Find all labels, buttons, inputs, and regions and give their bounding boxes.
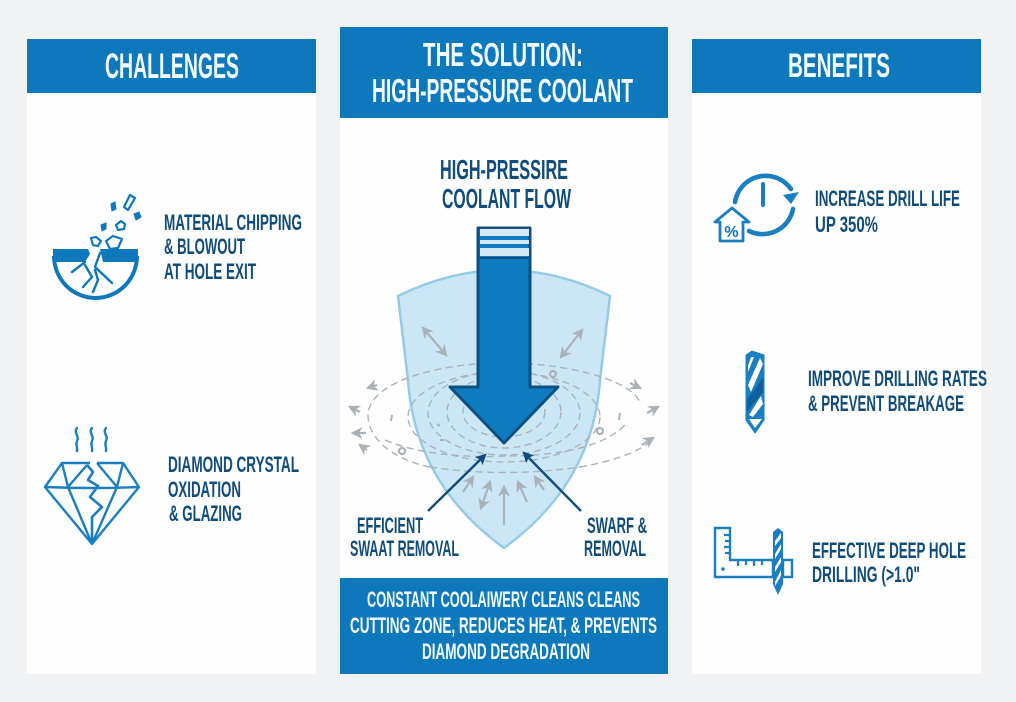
swirling flow lines (368, 363, 652, 472)
text: drill life (815, 186, 960, 237)
text: coolant flow title: COOLANT FLOW (442, 183, 571, 214)
text: swarf removal: SWARF & (587, 513, 647, 538)
text: swarf removal: REMOVAL (584, 536, 646, 561)
heading: solution: HIGH-PRESSURE COOLANT (372, 72, 633, 109)
panel: challenges (27, 39, 316, 674)
text: deep hole: DRILLING (>1.0" (812, 562, 920, 587)
icon: cracked diamond with heat (45, 428, 139, 544)
text: drilling rates (808, 366, 987, 416)
text: material chipping: MATERIAL CHIPPING (164, 210, 302, 235)
text: material chipping: & BLOWOUT (164, 234, 245, 259)
text: coolant flow title: HIGH-PRESSIRE (440, 154, 568, 185)
heading: solution: THE SOLUTION: (423, 36, 583, 73)
big coolant arrow (450, 228, 558, 443)
grey flow arrows (350, 328, 658, 525)
text: coolant flow title (440, 154, 571, 214)
footer banner: CONSTANT COOLAIWERY CLEANS CLEANS (367, 587, 640, 612)
callout arrows (428, 453, 581, 511)
heading: benefits (692, 39, 981, 93)
icon: drill bit (746, 351, 764, 433)
text: diamond oxidation: OXIDATION (168, 477, 241, 502)
text: diamond oxidation (168, 452, 299, 526)
text: diamond oxidation: & GLAZING (169, 501, 242, 526)
icon: clock with percent house (715, 176, 799, 241)
text: diamond oxidation: DIAMOND CRYSTAL (168, 452, 299, 477)
text: drill life: UP 350% (815, 212, 878, 237)
text: efficient removal (350, 513, 459, 561)
footer banner (340, 578, 668, 674)
text: efficient removal: SWAAT REMOVAL (350, 536, 459, 561)
text: deep hole (812, 538, 966, 587)
heading: challenges (27, 39, 316, 93)
heading: challenges: CHALLENGES (105, 47, 239, 86)
panel: solution (340, 27, 668, 674)
footer banner: CUTTING ZONE, REDUCES HEAT, & PREVENTS (350, 613, 657, 638)
heading: benefits: BENEFITS (788, 47, 890, 85)
icon: clock with percent house: % (724, 224, 739, 241)
icon: material chipping (53, 195, 141, 298)
panel: benefits (692, 39, 987, 674)
heading: solution (340, 27, 668, 118)
text: material chipping: AT HOLE EXIT (164, 259, 256, 284)
text: swarf removal (584, 513, 647, 561)
text: material chipping (164, 210, 302, 284)
shield: coolant zone (398, 270, 610, 548)
text: efficient removal: EFFICIENT (357, 513, 423, 538)
footer banner: DIAMOND DEGRADATION (422, 639, 590, 664)
icon: ruler and drill (715, 528, 792, 595)
